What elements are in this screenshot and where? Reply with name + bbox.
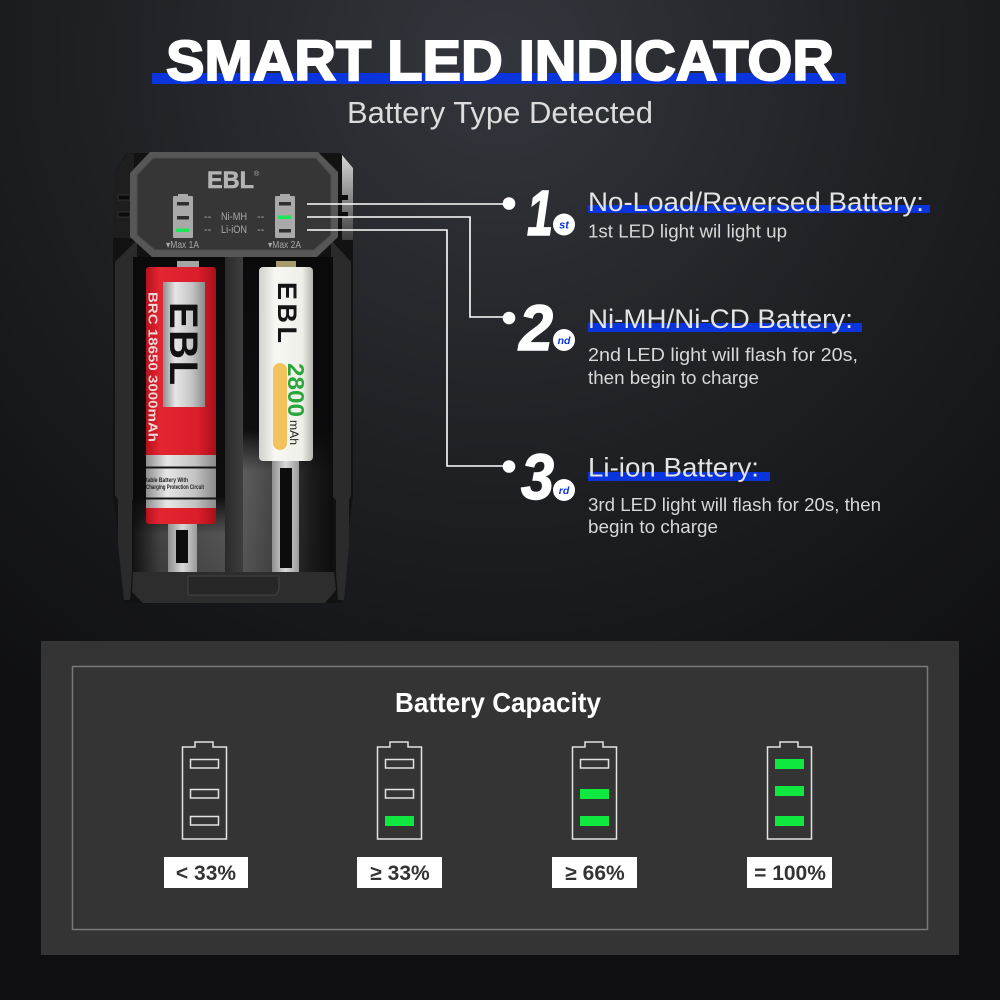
white battery: 2800	[283, 363, 309, 417]
panel labels: Li-iON	[221, 224, 247, 236]
title: SMART LED INDICATOR	[166, 29, 834, 93]
panel labels: --	[257, 211, 265, 223]
number 2: 2	[518, 292, 553, 364]
label: ≥ 33%	[370, 862, 430, 885]
heading highlight	[588, 472, 770, 481]
right metal contact	[272, 461, 299, 572]
item 2: Ni-MH	[518, 292, 862, 388]
panel heading: Battery Capacity	[395, 687, 601, 718]
ordinal badge: rd	[559, 485, 570, 497]
capacity level: under 33%	[164, 742, 248, 888]
description	[588, 495, 881, 537]
white battery: EBL	[272, 282, 302, 343]
red battery	[146, 261, 216, 524]
panel labels: ▾Max 1A	[166, 240, 199, 251]
battery icon	[182, 742, 226, 839]
battery slots	[133, 257, 333, 572]
bottom plate	[132, 572, 336, 603]
description: 3rd LED light will flash for 20s, then	[588, 495, 881, 515]
description: 1st LED light wil light up	[588, 222, 787, 242]
panel: battery capacity	[41, 641, 959, 955]
heading: Ni-MH/Ni-CD Battery:	[588, 304, 853, 334]
number 3: 3	[521, 441, 554, 513]
right LED indicator	[275, 194, 295, 238]
capacity level: 100%	[747, 742, 832, 888]
label	[747, 857, 832, 888]
ordinal badge: nd	[558, 335, 571, 347]
description: then begin to charge	[588, 368, 759, 388]
connector lines	[307, 198, 514, 472]
ordinal badge	[553, 479, 575, 501]
capacity level: at least 33%	[357, 742, 442, 888]
red battery: table Battery With	[146, 477, 188, 484]
label: < 33%	[176, 862, 236, 885]
description: begin to charge	[588, 517, 718, 537]
red battery: Charging Protection Circuit	[146, 484, 205, 491]
label	[357, 857, 442, 888]
panel labels: --	[257, 224, 265, 236]
panel labels: ▾Max 2A	[268, 240, 301, 251]
white battery: mAh	[287, 420, 301, 445]
label: ≥ 66%	[565, 862, 625, 885]
battery icon	[768, 742, 812, 839]
left metal contact	[168, 524, 197, 572]
ordinal badge: st	[559, 220, 570, 232]
heading: Li-ion Battery:	[588, 452, 759, 482]
ordinal badge	[553, 329, 575, 351]
charger body	[113, 153, 353, 603]
label	[552, 857, 637, 888]
label	[164, 857, 248, 888]
top control panel	[130, 152, 338, 257]
label: = 100%	[754, 862, 826, 885]
battery icon	[572, 742, 616, 839]
panel labels: --	[204, 211, 212, 223]
capacity level: at least 66%	[552, 742, 637, 888]
white battery	[259, 261, 313, 461]
description	[588, 345, 858, 388]
heading highlight	[588, 323, 862, 332]
ordinal badge	[553, 214, 575, 236]
red battery: EBL	[161, 302, 205, 385]
item 3: Li-ion	[521, 441, 881, 537]
registered mark: ®	[254, 170, 260, 178]
panel labels	[166, 211, 301, 251]
side rails	[113, 153, 353, 600]
heading: No-Load/Reversed Battery:	[588, 187, 924, 217]
battery icon	[378, 742, 422, 839]
panel labels: --	[204, 224, 212, 236]
brand logo: EBL	[207, 167, 254, 194]
description: 2nd LED light will flash for 20s,	[588, 345, 858, 365]
panel labels: Ni-MH	[221, 211, 247, 223]
number 1: 1	[527, 177, 553, 249]
left LED indicator	[173, 194, 193, 238]
subtitle: Battery Type Detected	[347, 95, 653, 130]
charger with batteries	[113, 152, 353, 603]
red battery: BRC 18650 3000mAh	[146, 292, 160, 442]
heading highlight	[588, 205, 930, 213]
item 1: no-load	[527, 177, 930, 249]
